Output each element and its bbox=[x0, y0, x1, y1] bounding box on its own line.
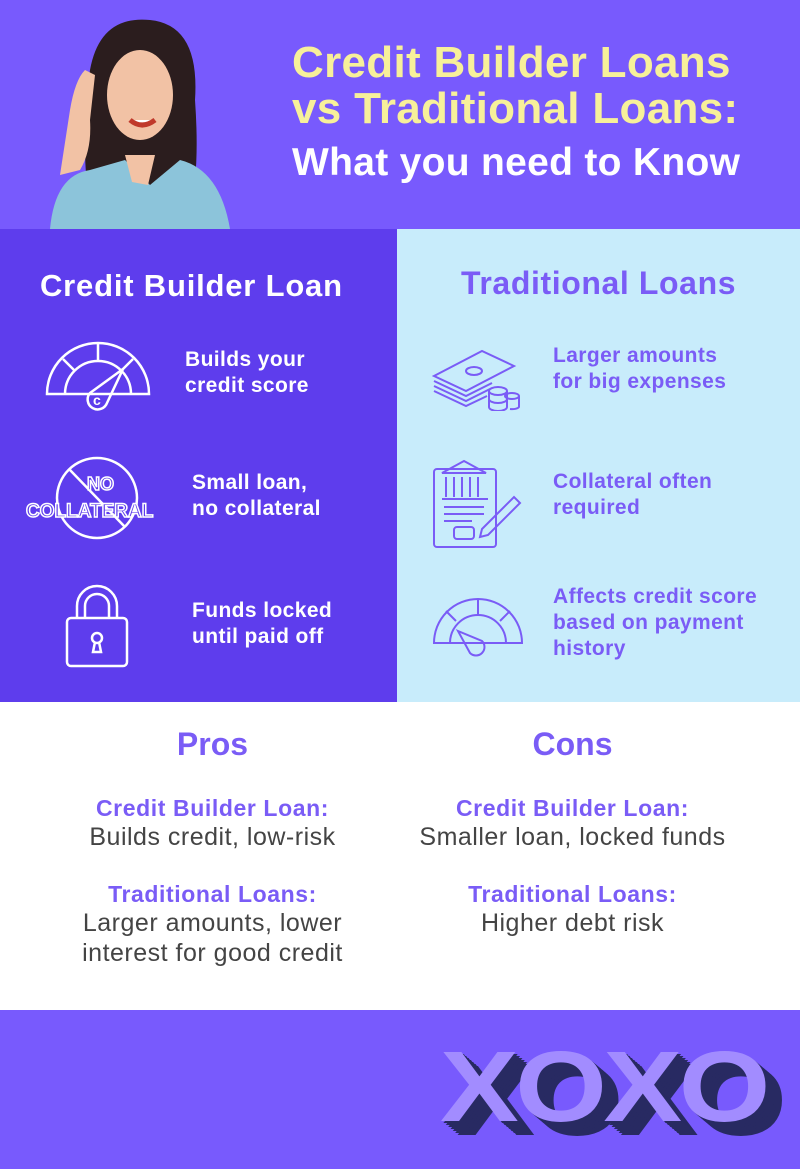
heading: Credit Builder Loan bbox=[40, 268, 343, 303]
icon: no collateral bbox=[26, 456, 154, 540]
text: small loan bbox=[192, 471, 321, 520]
icon: no collateral: COLLATERAL bbox=[26, 501, 154, 522]
text: affects credit bbox=[553, 585, 757, 660]
title: vs Traditional Loans: bbox=[292, 84, 738, 133]
text: affects credit: history bbox=[553, 637, 626, 660]
text: collateral required: Collateral often bbox=[553, 470, 712, 493]
heading: pros: Pros bbox=[177, 726, 248, 762]
text: traditional pros bbox=[82, 881, 343, 967]
icon: money stack bbox=[432, 350, 520, 411]
text: collateral required: required bbox=[553, 496, 640, 519]
header band bbox=[0, 0, 800, 229]
icon: bank document bbox=[433, 460, 522, 548]
text: credit builder cons: Smaller loan, locked funds bbox=[419, 823, 726, 851]
logo: XOXO: XOXO bbox=[440, 1031, 767, 1143]
text: credit builder pros bbox=[89, 795, 336, 851]
text: traditional pros: Larger amounts, lower bbox=[83, 909, 342, 937]
text: small loan: no collateral bbox=[192, 497, 321, 520]
icon: gauge bbox=[433, 598, 523, 656]
section: cons bbox=[419, 726, 726, 937]
text: funds locked bbox=[192, 599, 332, 648]
text: credit builder pros: Builds credit, low-risk bbox=[89, 823, 336, 851]
title bbox=[292, 38, 738, 133]
subtitle: What you need to Know bbox=[292, 141, 740, 184]
text: builds credit: Builds your bbox=[185, 348, 305, 371]
icon: gauge: c bbox=[93, 392, 101, 408]
text: builds credit: credit score bbox=[185, 374, 309, 397]
text: credit builder pros: Credit Builder Loan: bbox=[96, 795, 329, 821]
text: affects credit: based on payment bbox=[553, 611, 744, 634]
text: credit builder cons: Credit Builder Loan: bbox=[456, 795, 689, 821]
text: larger amounts: for big expenses bbox=[553, 370, 726, 393]
text: traditional cons bbox=[468, 881, 677, 937]
text: larger amounts: Larger amounts bbox=[553, 344, 717, 367]
icon: no collateral: NO bbox=[87, 474, 114, 494]
title: Credit Builder Loans bbox=[292, 38, 731, 87]
panel: traditional loans bbox=[397, 229, 800, 702]
heading: Traditional Loans bbox=[461, 265, 736, 301]
text: small loan: Small loan, bbox=[192, 471, 307, 494]
panel: credit builder loan bbox=[0, 229, 397, 702]
illustration: woman bbox=[50, 20, 230, 229]
text: traditional pros: interest for good credit bbox=[82, 939, 343, 967]
icon: padlock bbox=[66, 584, 128, 668]
text: funds locked: until paid off bbox=[192, 625, 324, 648]
section: pros bbox=[82, 726, 343, 967]
text: traditional pros: Traditional Loans: bbox=[108, 881, 317, 907]
text: funds locked: Funds locked bbox=[192, 599, 332, 622]
text: collateral required bbox=[553, 470, 712, 519]
footer band bbox=[0, 1010, 800, 1169]
text: larger amounts bbox=[553, 344, 726, 393]
text: credit builder cons bbox=[419, 795, 726, 851]
text: affects credit: Affects credit score bbox=[553, 585, 757, 608]
heading: cons: Cons bbox=[532, 726, 612, 762]
text: traditional cons: Higher debt risk bbox=[481, 909, 664, 937]
icon: gauge bbox=[46, 342, 150, 411]
text: builds credit bbox=[185, 348, 309, 397]
text: traditional cons: Traditional Loans: bbox=[468, 881, 677, 907]
